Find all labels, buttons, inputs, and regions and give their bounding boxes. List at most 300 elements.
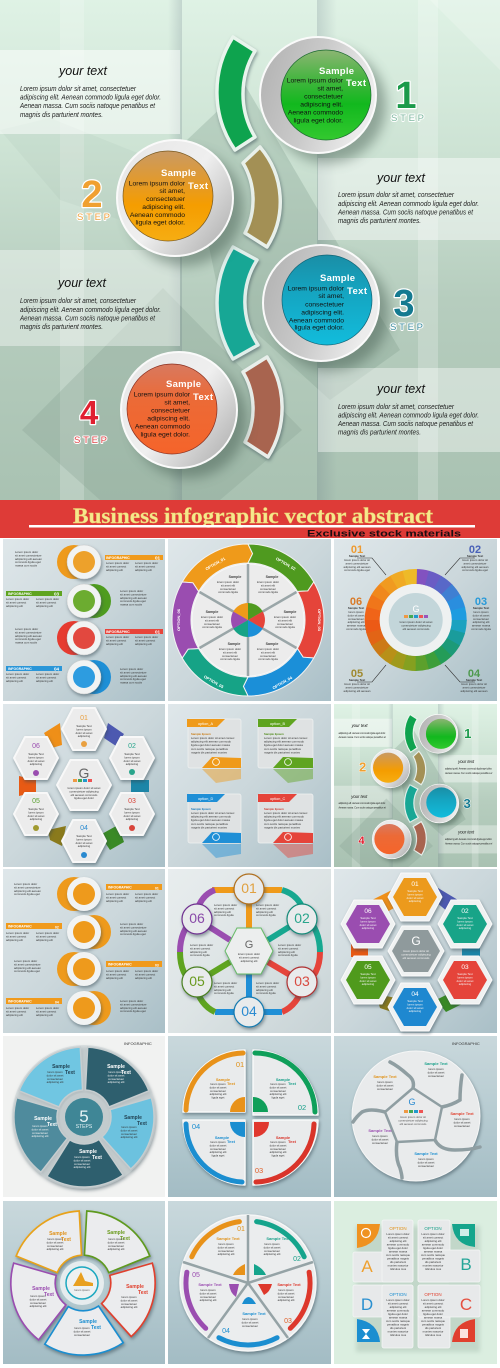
network text: sit amet consect <box>256 906 276 910</box>
wedge body text: lorem ipsum <box>278 1288 294 1292</box>
number labels <box>350 544 487 680</box>
wedge text: Sample Text <box>242 1311 266 1316</box>
text block: your text 1: Aenean massa. Cum sociis natoque penatibus et <box>19 103 156 110</box>
option letters: A <box>361 1257 373 1276</box>
option headings: OPTION <box>424 1226 442 1231</box>
sector body text: adipiscing elit <box>121 1135 138 1139</box>
wedge labels: 03 <box>284 1318 292 1325</box>
sector labels: Text <box>44 1292 54 1298</box>
hexagon labels: dolor sit amet <box>124 759 141 763</box>
petal text: lorem ipsum dolor <box>219 647 241 651</box>
quarters <box>183 1050 318 1185</box>
side text: dolor sit amet <box>473 613 490 617</box>
outer ring <box>180 890 320 1012</box>
row 2 green: massa cum sociis <box>120 603 143 607</box>
row 4 blue: adipiscing elit <box>36 679 53 683</box>
five sectors <box>12 1045 156 1189</box>
corner icons <box>357 1224 475 1342</box>
option body text: montes nascetur <box>423 1264 443 1268</box>
label: sample text 2: Lorem ipsum dolor <box>129 180 186 188</box>
subtitle: Exclusive stock materials <box>307 528 461 540</box>
quarter body text: ligula eget <box>272 1096 285 1100</box>
side text <box>344 554 491 693</box>
card text: Lorem ipsum dolor sit amet consec <box>191 736 235 740</box>
numbered circles <box>182 874 317 1027</box>
sector labels: Text <box>138 1290 148 1296</box>
centre logo tiles <box>404 604 428 618</box>
network text: sit amet consect <box>239 955 259 959</box>
row 4 blue: massa cum sociis <box>120 681 143 685</box>
network text: adipiscing elit <box>190 950 207 954</box>
option body text: aenean massa <box>424 1250 443 1254</box>
hexagon labels: adipiscing <box>78 844 91 848</box>
label: sample text 1: sit amet, <box>317 86 343 92</box>
text block: your text 2: adipiscing elit. Aenean commodo ligula eget dolor. <box>338 201 479 208</box>
sector body text: adipiscing elit <box>47 1080 64 1084</box>
quarter body text: adipiscing elit <box>210 1092 227 1096</box>
petal text: sit amet elit <box>221 583 235 587</box>
side text: Sample Text <box>466 678 482 682</box>
option body text: cum sociis natoque <box>386 1319 410 1323</box>
row 2 green: sit amet consectetuer <box>120 592 147 596</box>
row 4 blue <box>6 660 147 694</box>
list text: Lorem ipsum dolor <box>120 922 143 926</box>
wedge body text: consectetuer <box>200 1295 216 1299</box>
quarter body text: lorem ipsum <box>270 1140 286 1144</box>
quarter body text: lorem ipsum <box>270 1082 286 1086</box>
list text: Lorem ipsum dolor <box>106 892 129 896</box>
list text: sit amet consect <box>106 972 126 976</box>
petal text: lorem ipsum dolor <box>257 647 279 651</box>
text block: your text 1: magnis dis parturient montes. <box>20 112 103 119</box>
hexagon labels: 06 <box>32 743 40 750</box>
wedge body text: dolor sit amet <box>218 1245 235 1249</box>
hexagon labels: ligula eget dolor <box>74 796 94 800</box>
wedge labels: 05 <box>192 1272 200 1279</box>
sector text <box>34 1064 147 1161</box>
wedge body text: dolor sit amet <box>200 1291 217 1295</box>
sector body text: lorem ipsum <box>74 1155 90 1159</box>
hexagon labels: adipiscing <box>78 734 91 738</box>
wedge body text <box>200 1242 295 1328</box>
ring of colour wedges <box>372 576 459 664</box>
ring segment purple <box>172 582 199 658</box>
label: sample text 2: Aenean commodo <box>130 212 185 219</box>
network text: commodo ligula <box>190 953 210 957</box>
row 1 orange: sit amet consect <box>106 564 126 568</box>
hexagon labels: lorem ipsum <box>76 837 92 841</box>
hexagon text: lorem ipsum dolor sit <box>403 949 429 953</box>
step 2 circle <box>117 140 243 266</box>
arc segment: green <box>217 37 255 150</box>
list text: Lorem ipsum dolor <box>36 931 59 935</box>
wedge text: Sample Text <box>216 1236 240 1241</box>
hexagon text: adipiscing <box>409 1009 422 1013</box>
row 2 green <box>6 584 147 618</box>
hexagon text: 03 <box>461 964 469 971</box>
list text: adipiscing elit aenean <box>14 889 41 893</box>
option headings: OPTION <box>389 1226 407 1231</box>
hexagon text: Sample Text <box>407 889 423 893</box>
row 2 green: adipiscing elit <box>36 604 53 608</box>
petal text: sit amet elit <box>278 618 292 622</box>
option body text: dis parturient <box>390 1260 406 1264</box>
row 1 orange: sit amet consect <box>135 564 155 568</box>
hexagon text: dolor sit amet <box>407 896 424 900</box>
option body text: sit amet consect <box>423 1302 443 1306</box>
sector body text <box>32 1070 138 1169</box>
ball text: lorem ipsum <box>428 1067 444 1071</box>
wedge labels: 02 <box>293 1256 301 1263</box>
option body text: aenean massa <box>389 1250 408 1254</box>
sector body text: lorem ipsum <box>108 1070 124 1074</box>
panel: main step infographic <box>0 0 500 500</box>
option body text: ridiculus mus <box>390 1267 407 1271</box>
list text: commodo ligula eget <box>14 969 40 973</box>
thumbnail 6: miniature of main steps: adipiscing elit. Aenean commodo ligula eget dolor. <box>338 802 386 805</box>
option body text: montes nascetur <box>388 1264 408 1268</box>
hexagon text: lorem ipsum <box>457 975 473 979</box>
side text: adipiscing elit <box>348 620 365 624</box>
hexagon labels: Sample Text <box>28 752 44 756</box>
ball text: lorem ipsum <box>377 1080 393 1084</box>
row 4 blue: sit amet consect <box>36 675 56 679</box>
card text: ligula eget dolor aenean massa <box>264 818 303 822</box>
list text: adipiscing elit <box>36 1013 53 1017</box>
hexagon text <box>360 881 474 1013</box>
petal text: commodo ligula <box>202 625 222 629</box>
hexagon text: adipiscing <box>409 899 422 903</box>
petal text: commodo ligula <box>275 625 295 629</box>
side text: consectetuer <box>348 617 364 621</box>
numbers <box>189 880 310 1019</box>
sector body: lorem ipsum <box>30 1294 46 1298</box>
title banner <box>0 500 500 540</box>
header bars <box>6 884 162 1004</box>
hexagon labels: dolor sit amet <box>76 731 93 735</box>
side text: adipiscing elit aenean <box>461 689 488 693</box>
petal text: lorem ipsum dolor <box>257 580 279 584</box>
sector body: lorem ipsum <box>74 1326 90 1330</box>
row 2 green: adipiscing elit <box>6 604 23 608</box>
label: sample text 3: Aenean commodo <box>289 318 344 324</box>
card text: adipiscing elit aenean commodo <box>264 740 304 744</box>
label: sample text 1: Lorem ipsum dolor <box>287 78 344 84</box>
quarter body text: adipiscing elit <box>270 1150 287 1154</box>
option letters: C <box>460 1295 472 1314</box>
wedge body text: adipiscing elit <box>200 1298 217 1302</box>
ring segment green <box>248 544 314 592</box>
hexagon labels: elit aenean commodo <box>71 793 98 797</box>
hexagon text: lorem ipsum <box>457 919 473 923</box>
side text: adipiscing elit aenean <box>344 689 371 693</box>
row 1 orange: commodo ligula eget <box>15 560 41 564</box>
option body text: adipiscing elit <box>425 1239 442 1243</box>
side text: lorem ipsum dolor sit <box>344 682 370 686</box>
sector body: dolor sit amet <box>108 1240 125 1244</box>
row 3 red: adipiscing elit <box>135 642 152 646</box>
network text: sit amet consect <box>256 984 276 988</box>
card text: adipiscing elit aenean commodo <box>191 740 231 744</box>
thumbnail 6: miniature of main steps <box>332 702 499 870</box>
petal text: Sample <box>266 575 278 579</box>
wedge body text: consectetuer <box>218 1249 234 1253</box>
hexagon labels: G <box>79 765 89 781</box>
sector body text: lorem ipsum <box>47 1070 63 1074</box>
text block: your text 3: Lorem ipsum dolor sit amet, consectetuer <box>20 298 137 305</box>
thumbnail 4: white hexagons <box>3 704 165 867</box>
row 2 green: Lorem ipsum dolor <box>36 597 59 601</box>
thumbnail 9: coloured hexagons <box>334 869 497 1033</box>
option body text: dis parturient <box>425 1260 441 1264</box>
ball text: Sample Text <box>424 1061 448 1066</box>
list text: adipiscing elit aenean <box>120 929 147 933</box>
wedge body text: dolor sit amet <box>264 1245 281 1249</box>
card text: option_C <box>270 797 285 801</box>
quarter text: Sample <box>215 1135 230 1140</box>
card text: cum sociis natoque penatibus <box>264 822 301 826</box>
cards <box>353 1220 480 1348</box>
sector body text: lorem ipsum <box>121 1125 137 1129</box>
petal text: commodo ligula <box>220 657 240 661</box>
network text: commodo ligula <box>214 913 234 917</box>
coloured arcs <box>186 1053 315 1182</box>
sector text: Sample <box>124 1115 142 1121</box>
petal text: sit amet elit <box>205 618 219 622</box>
hexagon text: 05 <box>364 964 372 971</box>
hexagon text: 04 <box>411 991 419 998</box>
option body text: aenean commodo <box>387 1242 410 1246</box>
list text: sit amet consectetuer <box>14 962 41 966</box>
wedge body text: lorem ipsum <box>242 1317 258 1321</box>
ball text: G <box>408 1097 416 1107</box>
side text: lorem ipsum <box>473 610 489 614</box>
ball text: consectetuer <box>418 1164 434 1168</box>
side text: lorem ipsum dolor sit <box>461 682 487 686</box>
network text: commodo ligula <box>256 991 276 995</box>
quarter body text: ligula eget <box>272 1154 285 1158</box>
network text: commodo ligula <box>278 953 298 957</box>
hexagon text: elit aenean commodo <box>403 956 430 960</box>
hexagon text: 01 <box>411 881 419 888</box>
hexagon text: lorem ipsum <box>407 892 423 896</box>
text block: your text 2 <box>337 171 479 225</box>
network text: Lorem ipsum dolor <box>278 943 301 947</box>
hexagon labels: adipiscing <box>30 762 43 766</box>
sector body text: adipiscing elit <box>74 1165 91 1169</box>
hexagon text: adipiscing <box>459 982 472 986</box>
hexagon labels: dolor sit amet <box>124 814 141 818</box>
numbers: 05 <box>189 973 205 989</box>
wedge text: Sample Text <box>198 1282 222 1287</box>
option body text: aenean massa <box>424 1316 443 1320</box>
hexagon labels: dolor sit amet <box>28 759 45 763</box>
row 3 red: adipiscing elit <box>106 642 123 646</box>
card text: Sample lipsum <box>264 732 284 736</box>
network text: sit amet consect <box>214 906 234 910</box>
numbers: 03 <box>294 973 310 989</box>
text block: your text 4: your text <box>376 382 425 396</box>
option body text: ridiculus mus <box>425 1267 442 1271</box>
row 2 green: commodo ligula eget <box>120 599 146 603</box>
option body text: Lorem ipsum dolor <box>421 1232 445 1236</box>
step label 4: 4 <box>80 394 99 431</box>
option body text: Lorem ipsum dolor <box>386 1298 410 1302</box>
hub: STEPS <box>76 1124 93 1130</box>
hexagon labels: 03 <box>128 798 136 805</box>
network text: Lorem ipsum dolor <box>214 981 237 985</box>
row 4 blue: adipiscing elit aenean <box>120 674 147 678</box>
thumbnail 14: five wedge circle with arcs <box>168 1201 331 1364</box>
text block: your text 4: adipiscing elit. Aenean commodo ligula eget dolor. <box>338 412 479 420</box>
step label 1: 1 <box>395 75 417 117</box>
quarter text: Sample <box>216 1077 231 1082</box>
option letters: B <box>460 1255 472 1274</box>
row 1 orange: massa cum sociis <box>15 564 38 568</box>
option body text: aenean massa <box>389 1316 408 1320</box>
text block: your text 3: your text <box>57 276 106 290</box>
hexagon text: Sample Text <box>407 999 423 1003</box>
step label 1 <box>391 75 424 124</box>
number labels: 06 <box>350 596 362 608</box>
side text: amet consectetuer <box>345 561 369 565</box>
sector labels: Text <box>120 1236 130 1242</box>
arc segment: teal <box>217 247 258 359</box>
card text: cum sociis natoque penatibus <box>264 747 301 751</box>
side text: Sample Text <box>467 554 483 558</box>
number labels: 04 <box>468 668 481 680</box>
numbers: 06 <box>189 910 205 926</box>
side text: consectetuer <box>473 617 489 621</box>
option body text: penatibus magnis <box>387 1322 410 1326</box>
hexagon text: lorem ipsum <box>360 919 376 923</box>
option body text: montes nascetur <box>388 1330 408 1334</box>
thumbnail 10: five steps pie: INFOGRAPHIC <box>124 1041 152 1046</box>
label: sample text 1: Sample <box>319 66 354 77</box>
sector body text: dolor sit amet <box>121 1128 138 1132</box>
side text: Sample Text <box>349 678 365 682</box>
sector text: Text <box>65 1070 75 1076</box>
row 2 green: INFOGRAPHIC <box>8 592 32 596</box>
thumbnail 7: orange circles list <box>3 869 165 1033</box>
list text <box>6 882 158 1017</box>
side text: lorem ipsum <box>348 610 364 614</box>
list text: Lorem ipsum dolor <box>36 1006 59 1010</box>
sector labels: Sample <box>79 1319 97 1325</box>
coloured arcs <box>186 1222 310 1345</box>
list text: sit amet consect <box>6 1009 26 1013</box>
quarter body text: consectetuer <box>270 1089 286 1093</box>
step label 3: 3 <box>393 283 415 325</box>
hub: lorem ipsum <box>74 1288 90 1292</box>
list text: Lorem ipsum dolor <box>120 999 143 1003</box>
row 2 green: Lorem ipsum dolor <box>120 589 143 593</box>
thumbnail 3: colour wheel <box>334 539 497 701</box>
list text: commodo ligula eget <box>14 892 40 896</box>
sector body text: dolor sit amet <box>74 1158 91 1162</box>
thumbnail 6: miniature of main steps: Aenean massa. Cum sociis natoque penatibus et <box>444 772 493 775</box>
side text: consectetuer adipiscing <box>401 623 431 627</box>
wedge body text: lorem ipsum <box>218 1242 234 1246</box>
thumbnail 6: miniature of main steps: 2 <box>359 759 366 774</box>
list text: sit amet consect <box>36 934 56 938</box>
row 3 red: commodo ligula eget <box>15 637 41 641</box>
side text: commodo ligula <box>346 627 366 631</box>
network text: commodo ligula <box>256 913 276 917</box>
wedge body text: lorem ipsum <box>200 1288 216 1292</box>
list text: adipiscing elit <box>106 899 123 903</box>
option body text: ligula eget dolor <box>423 1312 443 1316</box>
hexagon text: Sample Text <box>457 916 473 920</box>
network text: Lorem ipsum dolor <box>256 903 279 907</box>
thumbnail 13: outlined five sectors <box>3 1201 165 1364</box>
quarter body text: consectetuer <box>210 1089 226 1093</box>
sector text: Sample <box>52 1064 70 1070</box>
numbers: 04 <box>241 1003 257 1019</box>
thumbnail 2: six option wheel <box>168 539 331 701</box>
ball text: dolor sit amet <box>372 1137 389 1141</box>
sector body: adipiscing elit <box>108 1247 125 1251</box>
centre hexagon <box>225 928 273 974</box>
numbers: 01 <box>241 880 257 896</box>
quarter labels: 03 <box>255 1166 263 1175</box>
header bars: INFOGRAPHIC <box>8 924 32 928</box>
text block: your text 2: Lorem ipsum dolor sit amet, consectetuer <box>338 192 455 199</box>
text block: your text 2: Aenean massa. Cum sociis natoque penatibus et <box>337 210 474 216</box>
side text: aenean massa <box>472 624 491 628</box>
row 1 orange <box>15 545 163 579</box>
row 4 blue: 04 <box>54 666 60 672</box>
sector body: adipiscing elit <box>47 1247 64 1251</box>
option body text: montes nascetur <box>423 1330 443 1334</box>
option body text: dis parturient <box>390 1326 406 1330</box>
thumbnail 6: miniature of main steps: adipiscing elit. Aenean commodo ligula eget dolor. <box>445 768 493 771</box>
list text: Lorem ipsum dolor <box>14 959 37 963</box>
numbers: 02 <box>294 910 310 926</box>
option body text: cum sociis natoque <box>386 1253 410 1257</box>
sector body: lorem ipsum <box>47 1237 63 1241</box>
quarter labels: 02 <box>298 1103 306 1112</box>
ball text: Sample Text <box>373 1074 397 1079</box>
sector body text: consectetuer <box>108 1077 124 1081</box>
network text: Lorem ipsum dolor <box>214 903 237 907</box>
quarter body text: consectetuer <box>270 1147 286 1151</box>
quarter body text: consectetuer <box>210 1147 226 1151</box>
petal text: Sample <box>229 575 241 579</box>
wedge body text: lorem ipsum <box>264 1242 280 1246</box>
quarter text <box>215 1077 297 1144</box>
option body text: ligula eget dolor <box>388 1312 408 1316</box>
quarter labels <box>192 1060 306 1175</box>
sector body text: adipiscing elit <box>108 1080 125 1084</box>
row 4 blue: Lorem ipsum dolor <box>6 672 29 676</box>
card text: option_A <box>198 722 213 726</box>
list text: adipiscing elit <box>135 899 152 903</box>
sector labels: Sample <box>32 1286 50 1292</box>
list text: Lorem ipsum dolor <box>106 969 129 973</box>
option body text: cum sociis natoque <box>421 1253 445 1257</box>
quarter text: Text <box>227 1081 236 1086</box>
hexagon text: G <box>411 934 421 948</box>
thumbnail 6: miniature of main steps: your text <box>351 723 368 728</box>
thumbnail 6: miniature of main steps: Aenean massa. Cum sociis natoque penatibus et <box>337 807 386 810</box>
arc segment: olive <box>243 147 280 247</box>
option labels <box>176 556 322 690</box>
quarter text: Text <box>288 1081 297 1086</box>
row 1 orange: Lorem ipsum dolor <box>135 561 158 565</box>
option body text: penatibus magnis <box>422 1322 445 1326</box>
hexagon text: lorem ipsum <box>407 1002 423 1006</box>
